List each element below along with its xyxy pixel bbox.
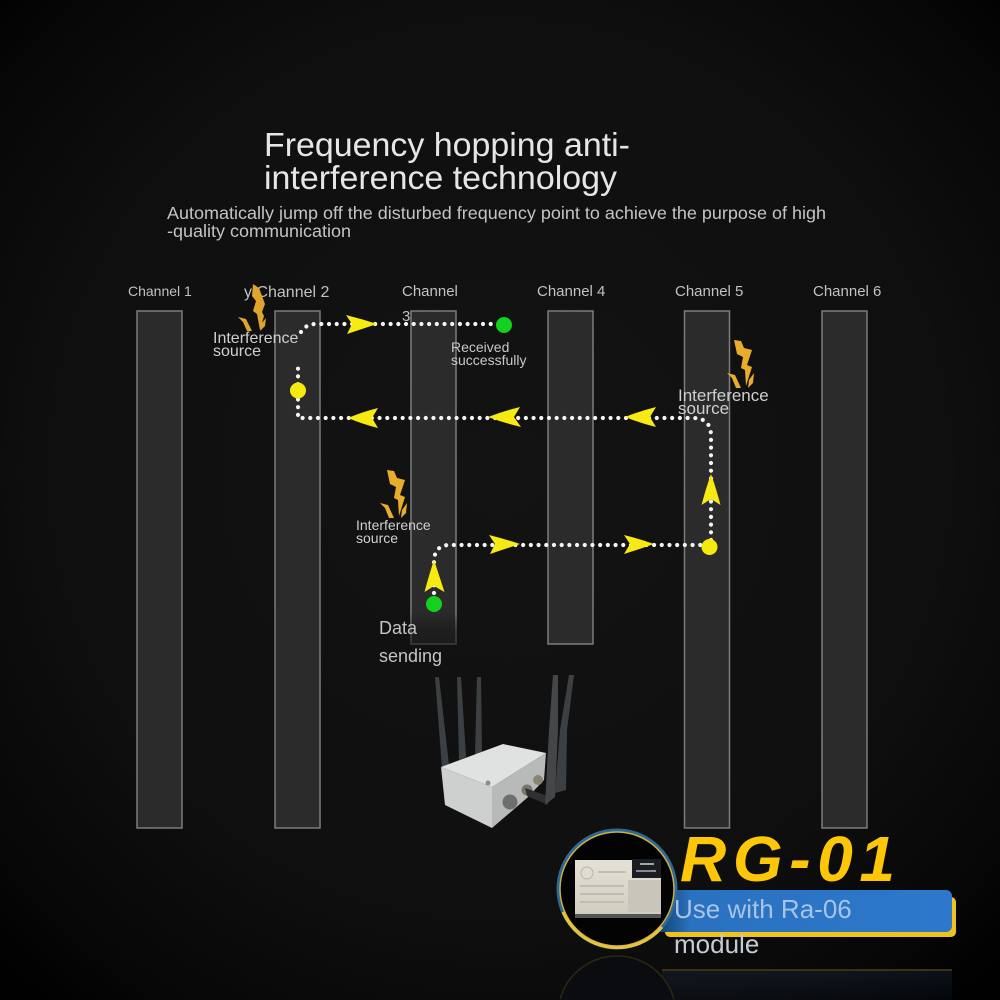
interference label 1: source (213, 343, 261, 360)
router device (435, 675, 574, 828)
node: data sending (426, 596, 442, 612)
enclosure (441, 744, 546, 787)
interference label 2: Interference (678, 386, 769, 405)
channel columns (137, 311, 867, 828)
channel labels: 3 (402, 308, 410, 325)
title line 2: interference technology (264, 159, 618, 196)
icon: lightning interference 1 (238, 284, 266, 331)
subtitle: Automatically jump off the disturbed frequency point to achieve the purpose of high (167, 203, 826, 223)
interference label 2: source (678, 399, 729, 418)
module circle (558, 830, 676, 948)
channel labels (128, 283, 881, 325)
title: Frequency hopping anti- (264, 126, 630, 163)
received label: Received (451, 339, 509, 355)
product badge (558, 823, 956, 1000)
banner (655, 890, 956, 937)
interference label 1: Interference (213, 330, 298, 347)
connectors (502, 794, 518, 810)
screw (486, 780, 490, 786)
banner text: Use with Ra-06 (674, 894, 852, 924)
icon: lightning interference 3 (380, 470, 407, 518)
antennas back (435, 675, 574, 793)
interference label 2 (678, 386, 769, 418)
data sending label (379, 618, 442, 666)
channel labels: Channel 4 (537, 283, 605, 300)
received label: successfully (451, 352, 526, 368)
data sending label: Data (379, 618, 418, 638)
node: received (496, 317, 512, 333)
product name: RG-01 (680, 823, 895, 895)
channel 3 bottom fade (405, 612, 461, 648)
interference label 1 (213, 330, 298, 360)
channel labels: Channel 5 (675, 283, 743, 300)
interference label 3 (356, 517, 431, 546)
channel labels: Channel (402, 283, 458, 300)
reflection (560, 956, 952, 1000)
node: hop 1 (702, 539, 718, 555)
module chip (575, 859, 661, 918)
arrows (346, 315, 720, 592)
node: hop 2 (290, 382, 306, 398)
front antenna (525, 788, 548, 805)
channel labels: y Channel 2 (244, 284, 329, 301)
banner text line 2: module (674, 929, 759, 959)
channel labels: Channel 1 (128, 283, 192, 299)
subtitle: -quality communication (167, 221, 351, 241)
interference label 3: source (356, 530, 398, 546)
interference label 3: Interference (356, 517, 431, 533)
subtitle (167, 203, 826, 241)
received label (451, 339, 526, 368)
icon: lightning interference 2 (727, 340, 754, 388)
hop path dotted (298, 324, 711, 593)
data sending label: sending (379, 646, 442, 666)
channel labels: Channel 6 (813, 283, 881, 300)
